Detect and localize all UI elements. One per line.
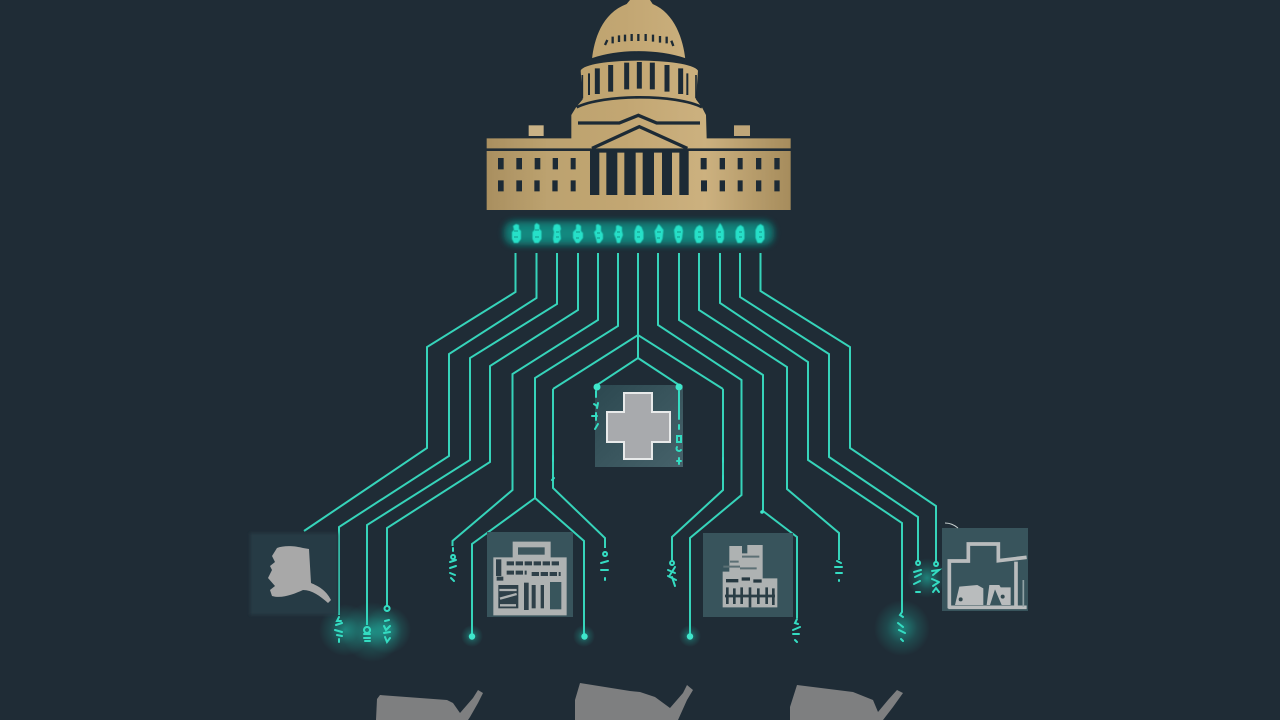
circuit lines (304, 253, 936, 636)
drum and lower dome body (487, 61, 791, 148)
drum columns (597, 62, 681, 94)
dome (592, 0, 685, 59)
panel: briefcase document (487, 532, 573, 617)
portico (590, 149, 689, 195)
map of USA: centre (575, 683, 693, 720)
icon: building block (723, 545, 777, 607)
centre trunk (553, 253, 723, 389)
roof line (578, 115, 700, 123)
panel: map of Alaska (250, 533, 338, 615)
glowing signal bar (504, 221, 774, 245)
dome base shadow (592, 52, 685, 59)
chimneys (529, 125, 544, 136)
map of USA: right (790, 685, 903, 720)
terminal glows (319, 558, 947, 662)
icon: Alaska shape (268, 546, 331, 603)
corner nodes (594, 384, 764, 514)
capitol building (487, 0, 791, 210)
left traces (304, 253, 516, 531)
pediment line (592, 127, 687, 148)
panel: medical case (942, 528, 1028, 611)
right traces (672, 389, 723, 560)
panel: hospital building (703, 533, 793, 617)
panel: health cross (595, 385, 683, 467)
icon: medical cross (607, 393, 670, 459)
main block (487, 151, 791, 210)
dome upper windows (605, 34, 673, 46)
windows right (701, 158, 780, 191)
icon: case outline (948, 544, 1027, 608)
windows left (498, 158, 576, 191)
small white arc near case (945, 523, 958, 528)
terminal dots (469, 633, 693, 640)
map of USA: left (376, 690, 483, 720)
icon: briefcase document (493, 542, 567, 615)
drum base line (577, 97, 702, 107)
terminal code marks (335, 391, 939, 642)
